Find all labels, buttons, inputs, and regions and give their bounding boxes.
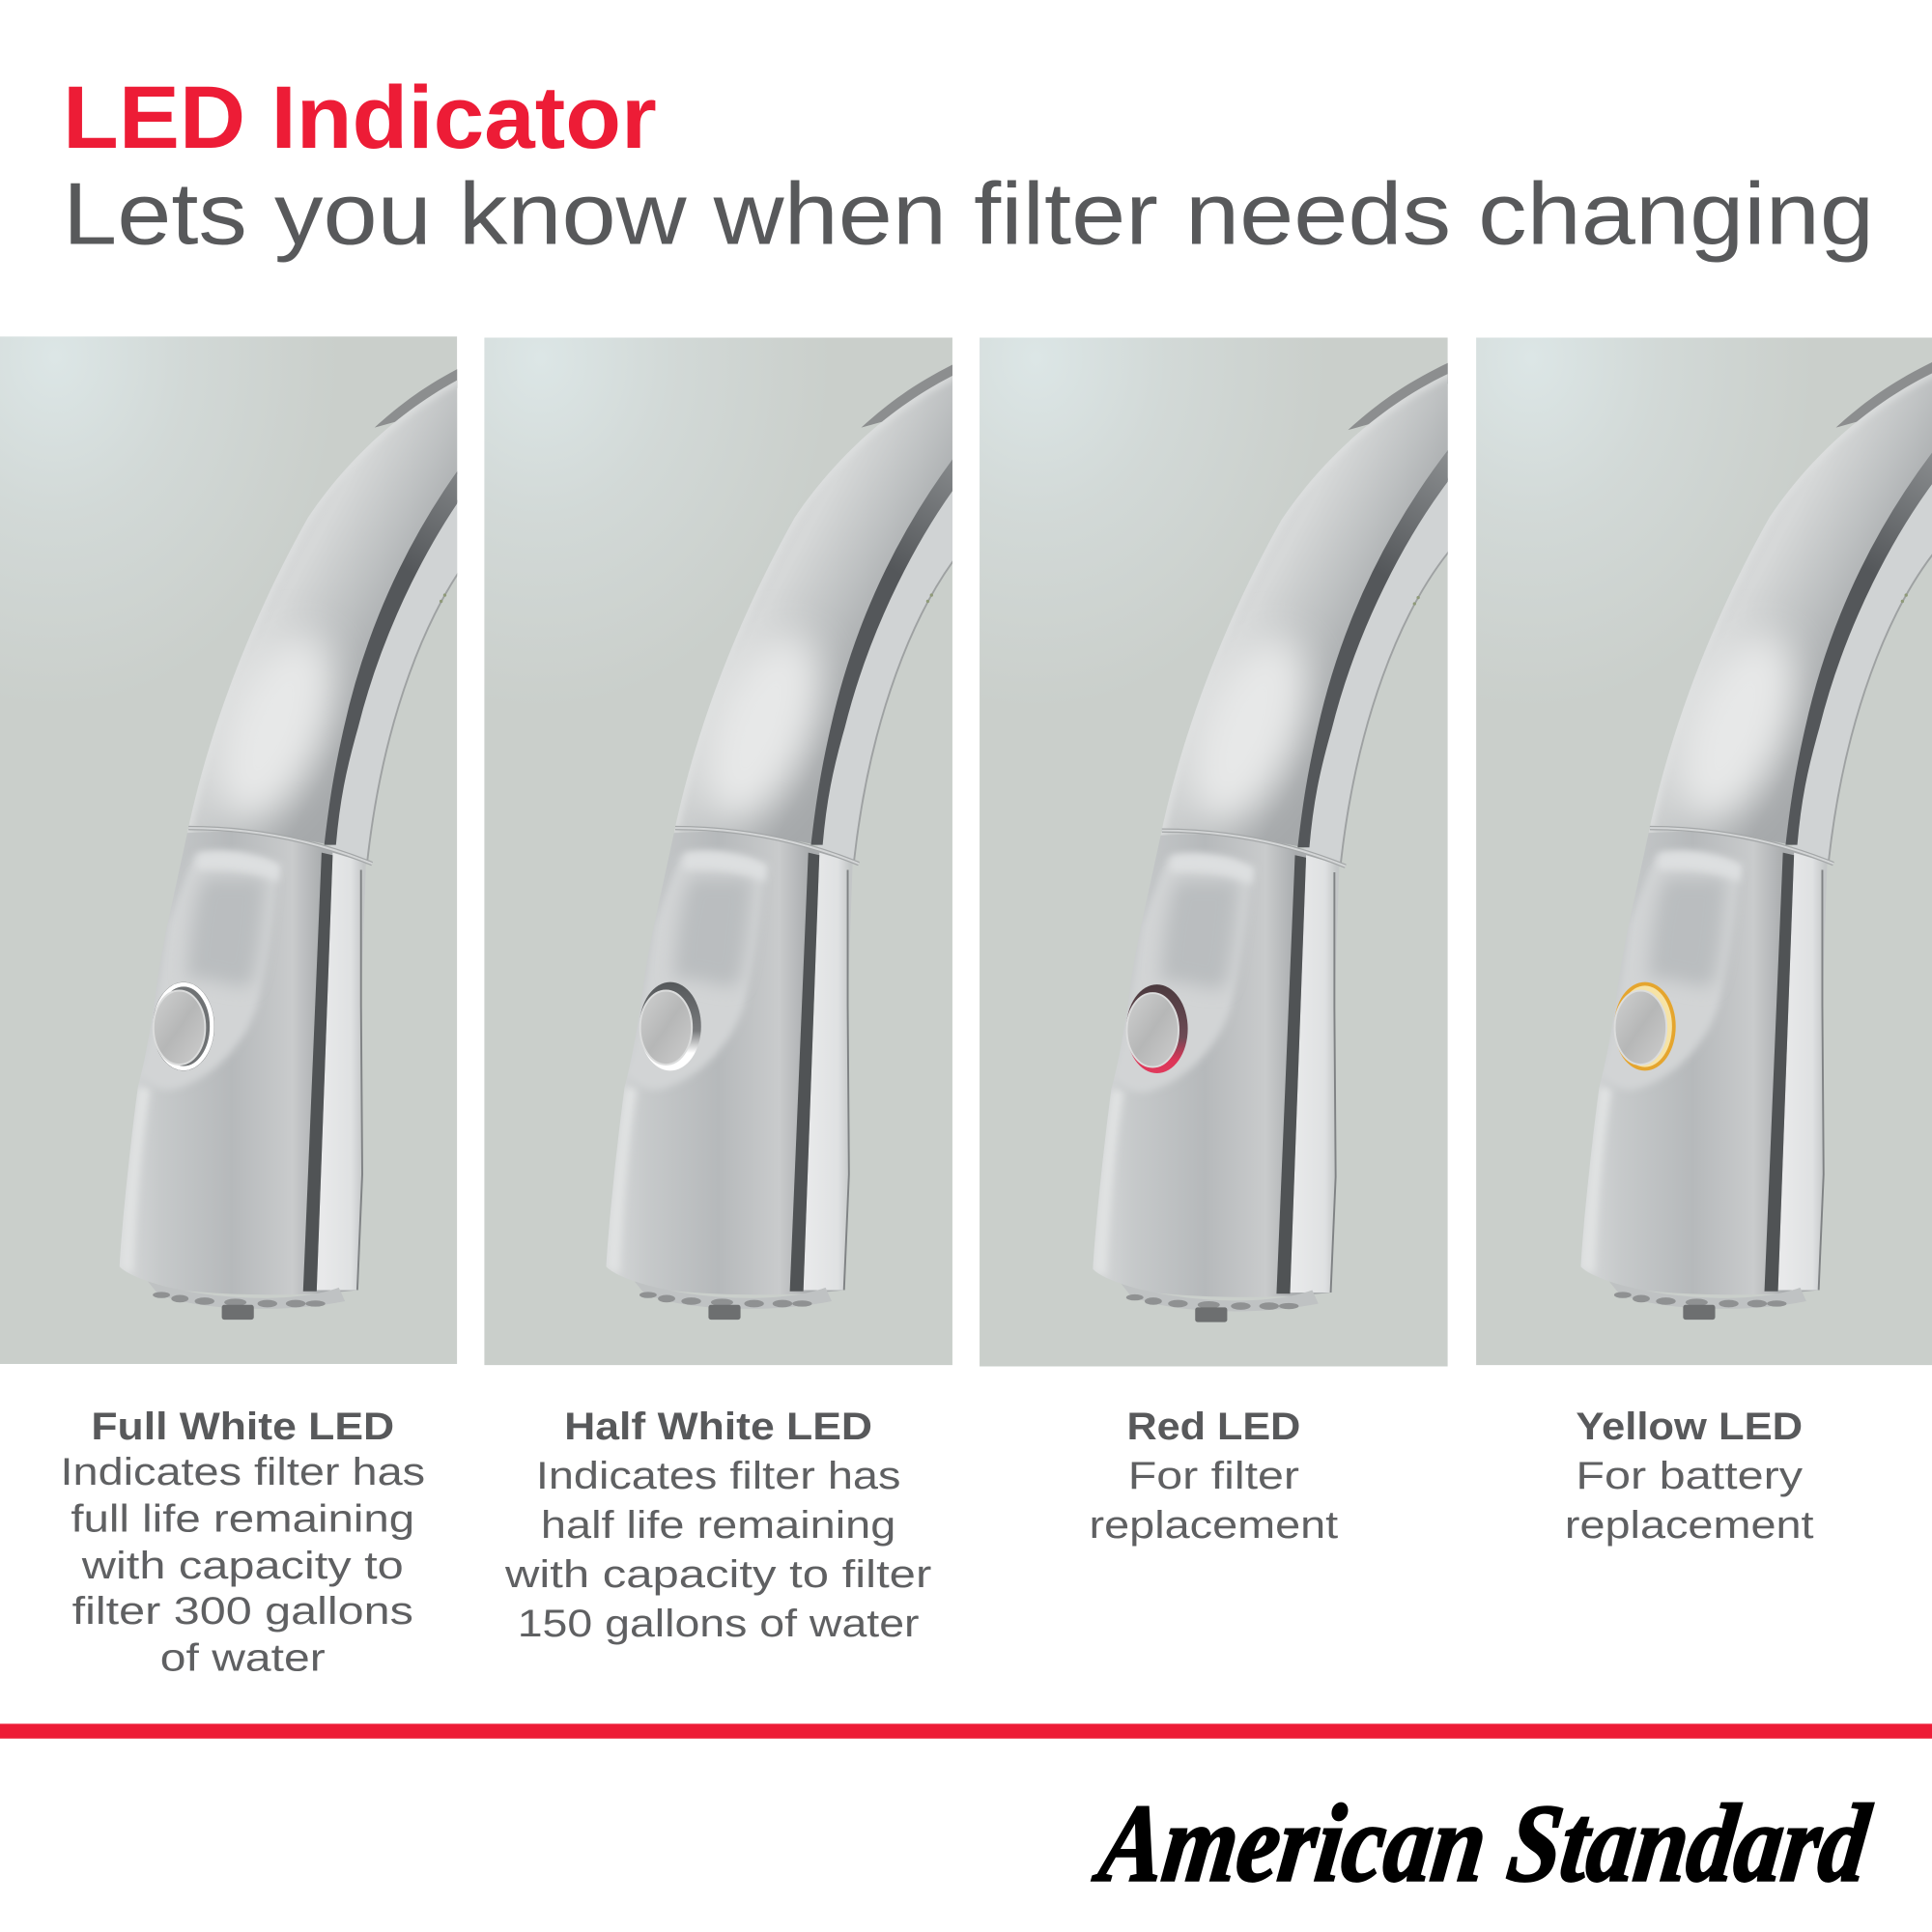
caption: red LED: For filter xyxy=(1128,1455,1299,1497)
title xyxy=(63,69,1874,264)
panel: half white LED faucet photo xyxy=(484,337,974,1365)
caption: full white LED xyxy=(60,1406,425,1680)
caption: yellow LED: Yellow LED xyxy=(1576,1406,1803,1448)
caption: red LED: replacement xyxy=(1090,1504,1338,1547)
faucet head xyxy=(1580,355,1932,1320)
panel: full white LED faucet photo xyxy=(0,336,487,1364)
caption: half white LED: Half White LED xyxy=(564,1406,872,1448)
panel: yellow LED faucet photo xyxy=(1476,337,1932,1365)
caption: red LED xyxy=(1090,1406,1338,1547)
faucet head xyxy=(1093,357,1460,1322)
LED ring: half white xyxy=(639,982,701,1070)
faucet head xyxy=(607,355,974,1320)
caption: full white LED: Indicates filter has xyxy=(60,1451,425,1493)
caption: half white LED: 150 gallons of water xyxy=(518,1603,920,1645)
caption: half white LED xyxy=(504,1406,931,1645)
caption: full white LED: full life remaining xyxy=(71,1497,414,1540)
subheading: Lets you know when filter needs changing xyxy=(63,166,1874,264)
caption: half white LED: Indicates filter has xyxy=(536,1455,900,1497)
caption: yellow LED xyxy=(1565,1406,1814,1547)
LED ring: red xyxy=(1126,984,1188,1073)
caption: full white LED: of water xyxy=(160,1637,326,1680)
faucet head xyxy=(120,355,487,1320)
caption: yellow LED: For battery xyxy=(1576,1455,1803,1497)
red divider bar xyxy=(0,1723,1932,1739)
caption: full white LED: with capacity to xyxy=(81,1545,404,1587)
caption: red LED: Red LED xyxy=(1126,1406,1300,1448)
caption: full white LED: filter 300 gallons xyxy=(72,1590,413,1633)
caption: half white LED: half life remaining xyxy=(541,1504,895,1547)
heading: LED Indicator: LED Indicator xyxy=(63,69,657,167)
caption: full white LED: Full White LED xyxy=(91,1406,394,1448)
LED ring: full white xyxy=(153,982,214,1070)
LED ring: yellow xyxy=(1614,982,1676,1070)
panel: red LED faucet photo xyxy=(980,337,1460,1367)
caption: half white LED: with capacity to filter xyxy=(504,1553,931,1596)
caption: yellow LED: replacement xyxy=(1565,1504,1814,1547)
